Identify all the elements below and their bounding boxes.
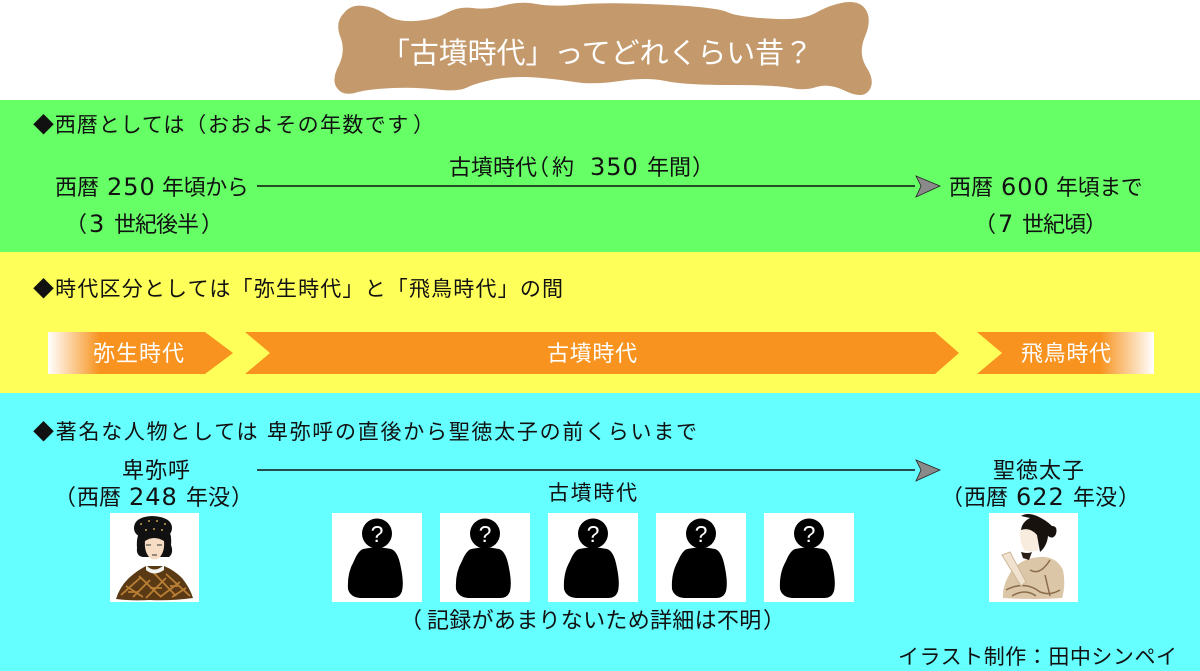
unknown person 5 — [764, 513, 854, 602]
chevron: Yayoi period: 弥生時代 — [93, 341, 184, 366]
unknown person 3 — [548, 513, 638, 602]
Himiko death year: 西暦 — [77, 485, 121, 510]
Shotoku death year: 西暦 — [964, 485, 1008, 510]
start century label: （ — [65, 212, 87, 237]
unknown person 5: ? — [803, 521, 815, 547]
Himiko name: 卑弥呼 — [122, 458, 190, 483]
period length label: 約 — [552, 155, 574, 180]
Himiko death year: ） — [231, 485, 253, 510]
Shotoku name: 聖徳太子 — [993, 458, 1084, 483]
chevron: Yayoi period — [48, 332, 233, 374]
note: records unknown: （ — [400, 608, 422, 633]
unknown person 1: ? — [371, 521, 383, 547]
end century label: 7 — [998, 210, 1014, 238]
arrow: timeline — [257, 176, 940, 197]
start century label: 3 — [89, 210, 105, 238]
heading: western calendar: おおよその年数です — [208, 114, 410, 137]
panel: period division — [0, 252, 1200, 393]
title banner — [334, 2, 872, 95]
period length label: 年間 — [647, 155, 691, 180]
unknown person 4 — [656, 513, 746, 602]
period length label: 古墳時代 — [449, 155, 537, 180]
chevron: Asuka period — [977, 332, 1154, 374]
end year label: 年頃まで — [1056, 175, 1142, 200]
heading: western calendar: ◆西暦としては（ — [33, 114, 207, 137]
note: records unknown: 記録があまりないため詳細は不明 — [427, 608, 762, 633]
end century label: ） — [1085, 212, 1107, 237]
end century label: （ — [974, 212, 996, 237]
heading: period division: ◆時代区分としては「弥生時代」と「飛鳥時代」の間 — [33, 278, 563, 301]
end year label: 600 — [1001, 173, 1050, 201]
start year label: 年頃から — [162, 175, 248, 200]
Himiko death year: 年没 — [186, 485, 230, 510]
Himiko death year: （ — [54, 485, 76, 510]
heading: famous people: ◆著名な人物としては 卑弥呼の直後から聖徳太子の前くらいまで — [33, 421, 697, 444]
arrow: people timeline — [257, 460, 940, 481]
portrait: Prince Shotoku — [989, 513, 1078, 602]
Shotoku death year: ） — [1118, 485, 1140, 510]
unknown person 1 — [332, 513, 422, 602]
chevron: Kofun period: 古墳時代 — [547, 341, 637, 366]
illustration credit: イラスト制作：田中シンペイ — [898, 646, 1177, 669]
start century label: 世紀後半 — [114, 212, 198, 237]
start century label: ） — [201, 212, 223, 237]
Shotoku death year: （ — [941, 485, 963, 510]
Shotoku death year: 年没 — [1073, 485, 1117, 510]
note: records unknown: ） — [763, 608, 785, 633]
unknown person 3: ? — [587, 521, 599, 547]
period length label: （ — [527, 155, 549, 180]
start year label: 250 — [107, 173, 156, 201]
chevron: Asuka period: 飛鳥時代 — [1021, 341, 1111, 366]
panel: western calendar years — [0, 100, 1200, 252]
title banner: 「古墳時代」ってどれくらい昔？ — [381, 37, 813, 70]
end year label: 西暦 — [949, 175, 993, 200]
Kofun period label: 古墳時代 — [548, 482, 637, 505]
unknown person 2: ? — [479, 521, 491, 547]
start year label: 西暦 — [55, 175, 99, 200]
Himiko death year: 248 — [129, 483, 178, 511]
Shotoku death year: 622 — [1016, 483, 1065, 511]
heading: western calendar: ） — [413, 114, 434, 137]
period length label: 350 — [590, 153, 639, 181]
unknown person 4: ? — [695, 521, 707, 547]
chevron: Kofun period — [245, 332, 959, 374]
unknown person 2 — [440, 513, 530, 602]
panel: famous people — [0, 393, 1200, 671]
portrait: Himiko — [110, 513, 199, 602]
period length label: ） — [692, 155, 714, 180]
end century label: 世紀頃 — [1022, 212, 1086, 237]
